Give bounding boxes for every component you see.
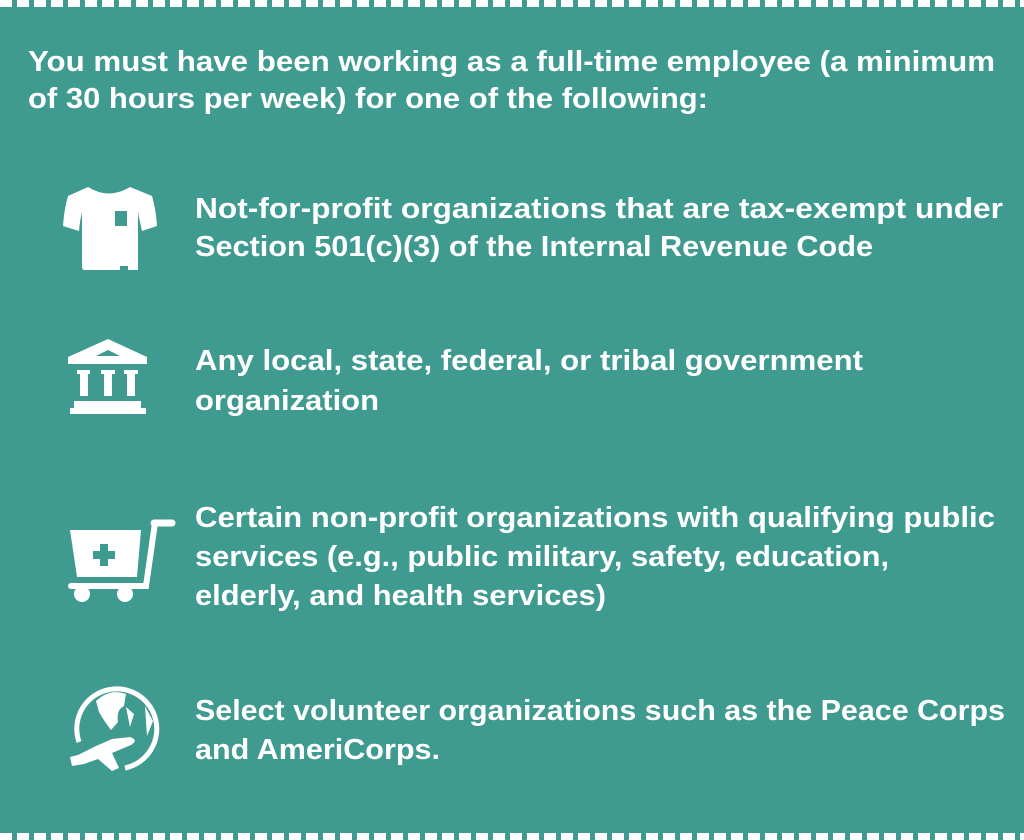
icon: medical cart (70, 523, 172, 602)
text: item 3 (195, 502, 995, 612)
title (28, 46, 995, 115)
text: item 1: Section 501(c)(3) of the Internal Revenue Code (195, 231, 873, 263)
text: item 4: Select volunteer organizations such as the Peace Corps (195, 695, 1005, 727)
title: of 30 hours per week) for one of the following: (28, 83, 708, 115)
text: item 4 (195, 695, 1005, 766)
icon: government building (68, 339, 147, 414)
text: item 2: organization (195, 385, 379, 417)
text: item 3: services (e.g., public military, safety, education, (195, 541, 889, 573)
title: You must have been working as a full-time employee (a minimum (28, 46, 995, 78)
text: item 4: and AmeriCorps. (195, 734, 440, 766)
icon: t-shirt (63, 187, 157, 270)
text: item 3: Certain non-profit organizations with qualifying public (195, 502, 995, 534)
text: item 3: elderly, and health services) (195, 580, 606, 612)
text: item 1: Not-for-profit organizations that are tax-exempt under (195, 193, 1003, 225)
text: item 1 (195, 193, 1003, 263)
text: item 2 (195, 345, 863, 417)
icon: globe with plane (70, 689, 157, 771)
text: item 2: Any local, state, federal, or tribal government (195, 345, 863, 377)
